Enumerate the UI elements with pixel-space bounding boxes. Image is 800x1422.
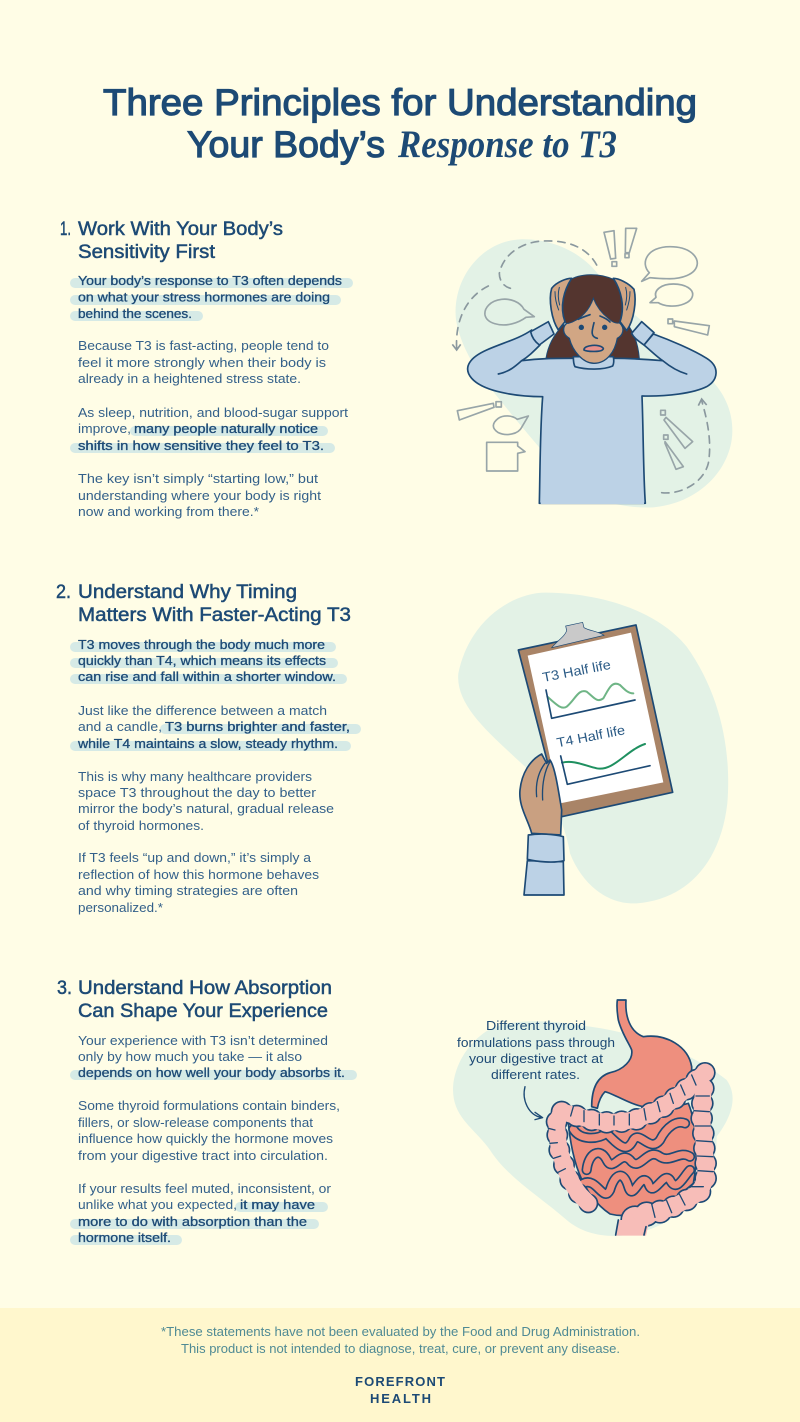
- title: Response to T3: [397, 123, 617, 166]
- heading: principle 2: [56, 581, 351, 626]
- heading: principle 2: Understand Why Timing: [78, 581, 297, 603]
- callout: digestive tract note: Different thyroid: [486, 1018, 586, 1033]
- paragraph with highlight: [70, 703, 361, 751]
- panel: principle 1 text: [60, 218, 353, 519]
- paragraph: This is why many healthcare providers: [78, 769, 313, 784]
- panel: principle 3 text: [57, 977, 357, 1245]
- paragraph: already in a heightened stress state.: [78, 371, 301, 386]
- disclaimer: *These statements have not been evaluated by the Food and Drug Administration.: [161, 1325, 640, 1339]
- callout: digestive tract note: your digestive tract at: [469, 1051, 603, 1066]
- paragraph: mirror the body’s natural, gradual release: [78, 801, 334, 816]
- speech bubbles: [485, 247, 697, 471]
- heading: principle 3: Can Shape Your Experience: [78, 1000, 328, 1022]
- highlighted paragraph: on what your stress hormones are doing: [78, 290, 330, 304]
- paragraph with highlight: while T4 maintains a slow, steady rhythm.: [77, 736, 338, 751]
- title: Three Principles for Understanding: [103, 82, 697, 123]
- logo: Forefront Health: FOREFRONT: [355, 1374, 445, 1389]
- highlighted paragraph: quickly than T4, which means its effects: [78, 653, 327, 668]
- chart: T4 half life: T4 Half life: [555, 722, 626, 750]
- paragraph with highlight: [70, 1181, 332, 1245]
- paragraph with highlight: many people naturally notice: [134, 421, 318, 436]
- paragraph with highlight: it may have: [240, 1197, 315, 1212]
- highlighted paragraph: [70, 637, 347, 684]
- heading: principle 1: [60, 218, 283, 263]
- callout: digestive tract note: formulations pass through: [457, 1035, 615, 1050]
- chart: T3 half life: T3 Half life: [541, 657, 612, 685]
- arrow to intestine: [524, 1087, 543, 1120]
- paragraph: [78, 850, 320, 915]
- paragraph: [78, 471, 321, 519]
- background blob: [453, 1021, 733, 1236]
- logo: Forefront Health: HEALTH: [370, 1391, 431, 1406]
- footer band: [0, 1308, 800, 1422]
- paragraph with highlight: more to do with absorption than the: [78, 1214, 307, 1229]
- stomach: [592, 1000, 692, 1108]
- paragraph: understanding where your body is right: [78, 488, 321, 503]
- disclaimer: [161, 1325, 640, 1356]
- small intestine: [568, 1103, 696, 1215]
- highlighted paragraph: can rise and fall within a shorter window.: [78, 669, 336, 684]
- paragraph: [78, 338, 329, 386]
- paragraph with highlight: Just like the difference between a match: [78, 703, 327, 718]
- paragraph: Because T3 is fast-acting, people tend to: [78, 338, 329, 353]
- background blob: [456, 239, 732, 507]
- paragraph: influence how quickly the hormone moves: [78, 1131, 334, 1146]
- paragraph with highlight: only by how much you take — it also: [78, 1049, 302, 1064]
- illustration: stressed woman: [452, 228, 732, 507]
- paragraph with highlight: As sleep, nutrition, and blood-sugar support: [78, 405, 348, 420]
- paragraph: [78, 1098, 340, 1163]
- chart: T4 half life: [555, 722, 650, 784]
- disclaimer: This product is not intended to diagnose, treat, cure, or prevent any disease.: [181, 1342, 620, 1356]
- paragraph: If T3 feels “up and down,” it’s simply a: [78, 850, 312, 865]
- callout: digestive tract note: [457, 1018, 615, 1082]
- callout: digestive tract note: different rates.: [491, 1067, 580, 1082]
- paragraph with highlight: and a candle,: [78, 719, 162, 734]
- paragraph with highlight: [70, 405, 348, 453]
- hand and sleeve: [520, 754, 564, 895]
- paragraph: and why timing strategies are often: [78, 883, 298, 898]
- paragraph with highlight: Your experience with T3 isn’t determined: [78, 1033, 328, 1048]
- logo: Forefront Health: [355, 1374, 445, 1406]
- paragraph with highlight: depends on how well your body absorbs it.: [78, 1065, 345, 1080]
- heading: principle 3: Understand How Absorption: [78, 977, 332, 999]
- heading: principle 3: [57, 977, 332, 1022]
- illustration: clipboard with half-life charts: [458, 593, 728, 903]
- heading: principle 1: Work With Your Body’s: [78, 218, 283, 240]
- illustration: digestive tract: [453, 1000, 733, 1236]
- paragraph: space T3 throughout the day to better: [78, 785, 317, 800]
- heading: principle 3: 3.: [57, 977, 72, 999]
- paragraph with highlight: If your results feel muted, inconsistent, or: [78, 1181, 332, 1196]
- paragraph: personalized.*: [78, 900, 163, 915]
- background blob: [458, 593, 728, 903]
- highlighted paragraph: behind the scenes.: [78, 306, 192, 321]
- large intestine: [546, 1062, 717, 1236]
- exclamation marks: [457, 228, 709, 469]
- paragraph with highlight: shifts in how sensitive they feel to T3.: [78, 438, 324, 453]
- paragraph with highlight: unlike what you expected,: [78, 1197, 237, 1212]
- paragraph with highlight: [70, 1033, 357, 1080]
- paragraph with highlight: improve,: [78, 421, 131, 436]
- highlighted paragraph: Your body’s response to T3 often depends: [78, 273, 343, 288]
- highlighted paragraph: [70, 273, 353, 321]
- paragraph: feel it more strongly when their body is: [78, 355, 327, 370]
- title: Your Body’s: [187, 124, 385, 165]
- paragraph: reflection of how this hormone behaves: [78, 867, 320, 882]
- title: [103, 82, 697, 166]
- woman figure: [468, 275, 716, 504]
- paragraph: Some thyroid formulations contain binders,: [78, 1098, 340, 1113]
- dashed motion arrows: [452, 241, 710, 493]
- paragraph: The key isn’t simply “starting low,” but: [78, 471, 318, 486]
- paragraph with highlight: hormone itself.: [78, 1230, 171, 1245]
- heading: principle 1: Sensitivity First: [78, 241, 216, 263]
- paragraph: now and working from there.*: [78, 504, 259, 519]
- heading: principle 2: Matters With Faster-Acting T3: [78, 604, 351, 626]
- paragraph with highlight: T3 burns brighter and faster,: [165, 719, 350, 734]
- paragraph: fillers, or slow-release components that: [78, 1115, 313, 1130]
- paragraph: [78, 769, 334, 833]
- heading: principle 1: 1.: [60, 218, 71, 240]
- highlighted paragraph: T3 moves through the body much more: [78, 637, 325, 652]
- paragraph: of thyroid hormones.: [78, 818, 204, 833]
- panel: principle 2 text: [56, 581, 361, 915]
- clipboard: [518, 622, 673, 817]
- paragraph: from your digestive tract into circulation.: [78, 1148, 328, 1163]
- heading: principle 2: 2.: [56, 581, 71, 603]
- chart: T3 half life: [541, 657, 635, 718]
